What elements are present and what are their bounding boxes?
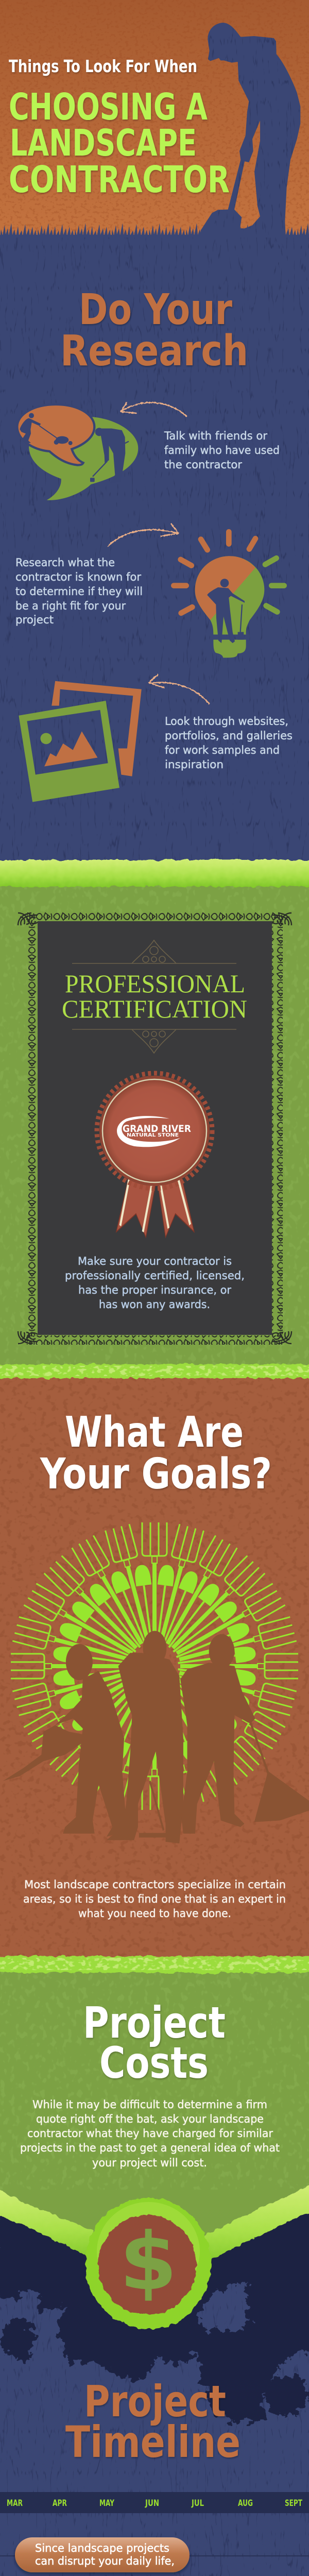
tree canopy shadow xyxy=(0,2201,309,2423)
icon: hedge circle with dollar sign xyxy=(85,2197,211,2329)
panel: project costs xyxy=(0,1956,309,2329)
icon: award ribbon rosette: GRAND RIVER xyxy=(123,1123,191,1134)
text: make sure your contractor: has the proper insurance, or xyxy=(78,1284,231,1296)
heading: do your research xyxy=(60,285,248,376)
text: research what the contractor is known for: project xyxy=(15,614,54,626)
ornament: top flourish xyxy=(72,940,236,963)
timeline pill 1: can disrupt your daily life, xyxy=(35,2555,175,2567)
icon: award ribbon rosette xyxy=(97,1073,212,1238)
text: look through websites: inspiration xyxy=(165,758,224,771)
text: talk with friends: Talk with friends or xyxy=(164,430,267,442)
panel: do your research xyxy=(0,222,309,866)
text: talk with friends xyxy=(164,430,280,471)
icon: radial garden tools xyxy=(11,1522,298,1810)
month band: SEPT xyxy=(285,2498,302,2509)
timeline chart xyxy=(0,2492,309,2576)
icon: hedge circle with dollar sign: $ xyxy=(119,2216,177,2308)
panel: navy lower background xyxy=(0,2184,309,2576)
timeline pill 1 xyxy=(15,2537,190,2572)
text: research what the contractor is known for: contractor is known for xyxy=(15,571,141,583)
text: make sure your contractor: has won any awards. xyxy=(99,1298,210,1311)
month band: JUL xyxy=(191,2498,204,2509)
arrow: to photo frames xyxy=(149,675,209,704)
panel: what are your goals xyxy=(0,1364,309,1960)
hero heading xyxy=(9,56,230,201)
text: talk with friends: family who have used xyxy=(164,444,280,456)
heading: do your research: Research xyxy=(60,327,248,376)
text: look through websites: for work samples and xyxy=(165,744,280,756)
text: while it may be difficult: While it may be difficult to determine a firm xyxy=(32,2098,267,2111)
certificate xyxy=(18,912,291,1345)
month band: MAR xyxy=(7,2498,23,2509)
text: while it may be difficult: quote right off the bat, ask your landscape xyxy=(36,2113,264,2125)
arrow: to light bulb xyxy=(108,524,178,546)
heading: project timeline: Project xyxy=(84,2376,226,2427)
heading: project timeline: Timeline xyxy=(65,2417,241,2467)
text: make sure your contractor: Make sure your contractor is xyxy=(78,1255,232,1267)
text: look through websites xyxy=(165,715,293,771)
month band: AUG xyxy=(238,2498,253,2509)
icon: photo frames xyxy=(19,681,142,802)
icon: worker with shovel silhouette xyxy=(200,23,301,235)
month band: JUN xyxy=(145,2498,159,2509)
certificate title: PROFESSIONAL xyxy=(65,969,245,998)
heading: what are your goals xyxy=(40,1408,272,1499)
hedge border xyxy=(0,2183,309,2264)
hero heading: CHOOSING A xyxy=(9,86,208,128)
leafy strip xyxy=(0,1956,309,1973)
month band: APR xyxy=(53,2498,67,2509)
text: most landscape contractors: Most landscape contractors specialize in certain xyxy=(24,1878,286,1891)
hero heading: LANDSCAPE xyxy=(10,122,197,164)
timeline pill 1: Since landscape projects xyxy=(35,2542,169,2554)
grass strip xyxy=(0,860,309,887)
text: while it may be difficult: contractor what they have charged for similar xyxy=(27,2127,273,2140)
heading: project timeline xyxy=(65,2376,241,2467)
leafy strip xyxy=(0,1364,309,1378)
text: while it may be difficult: your project will cost. xyxy=(92,2157,207,2169)
icon: light bulb with worker xyxy=(174,532,284,658)
text: most landscape contractors xyxy=(23,1878,286,1920)
text: while it may be difficult: projects in the past to get a general idea of what xyxy=(20,2142,280,2154)
panel: hero header xyxy=(0,0,309,242)
certificate title: CERTIFICATION xyxy=(62,994,247,1023)
panel: professional certification xyxy=(0,860,309,1370)
arrow: to speech bubbles xyxy=(121,402,186,416)
text: talk with friends: the contractor xyxy=(164,459,242,471)
heading: project costs: Costs xyxy=(99,2038,209,2088)
text: make sure your contractor: professionally certified, licensed, xyxy=(65,1269,245,1282)
text: most landscape contractors: what you need to have done. xyxy=(78,1907,231,1920)
heading: project costs: Project xyxy=(83,1997,226,2048)
certificate title xyxy=(62,969,247,1023)
text: research what the contractor is known for: Research what the xyxy=(15,556,115,569)
text: look through websites: portfolios, and galleries xyxy=(165,730,293,742)
text: most landscape contractors: areas, so it is best to find one that is an expert in xyxy=(23,1893,286,1905)
ornament: bottom flourish xyxy=(72,1029,236,1053)
icon: speech bubbles with workers xyxy=(17,404,138,500)
text: look through websites: Look through websites, xyxy=(165,715,288,727)
icon: award ribbon rosette: NATURAL STONE xyxy=(127,1132,179,1138)
text: while it may be difficult xyxy=(20,2098,280,2169)
logo: grand river white xyxy=(117,1116,180,1147)
text: research what the contractor is known for xyxy=(15,556,143,626)
month band xyxy=(0,2492,309,2513)
heading: what are your goals: What Are xyxy=(65,1408,244,1457)
text: research what the contractor is known for: to determine if they will xyxy=(15,585,143,598)
grass silhouette xyxy=(0,222,309,238)
text: research what the contractor is known for: be a right fit for your xyxy=(15,600,126,612)
text: make sure your contractor xyxy=(65,1255,245,1311)
heading: project costs xyxy=(83,1997,226,2088)
hero heading: CONTRACTOR xyxy=(9,158,230,201)
month band: MAY xyxy=(99,2498,114,2509)
icon: three landscapers silhouettes xyxy=(3,1631,309,1843)
heading: do your research: Do Your xyxy=(79,285,232,334)
hero heading: Things To Look For When xyxy=(9,56,197,76)
